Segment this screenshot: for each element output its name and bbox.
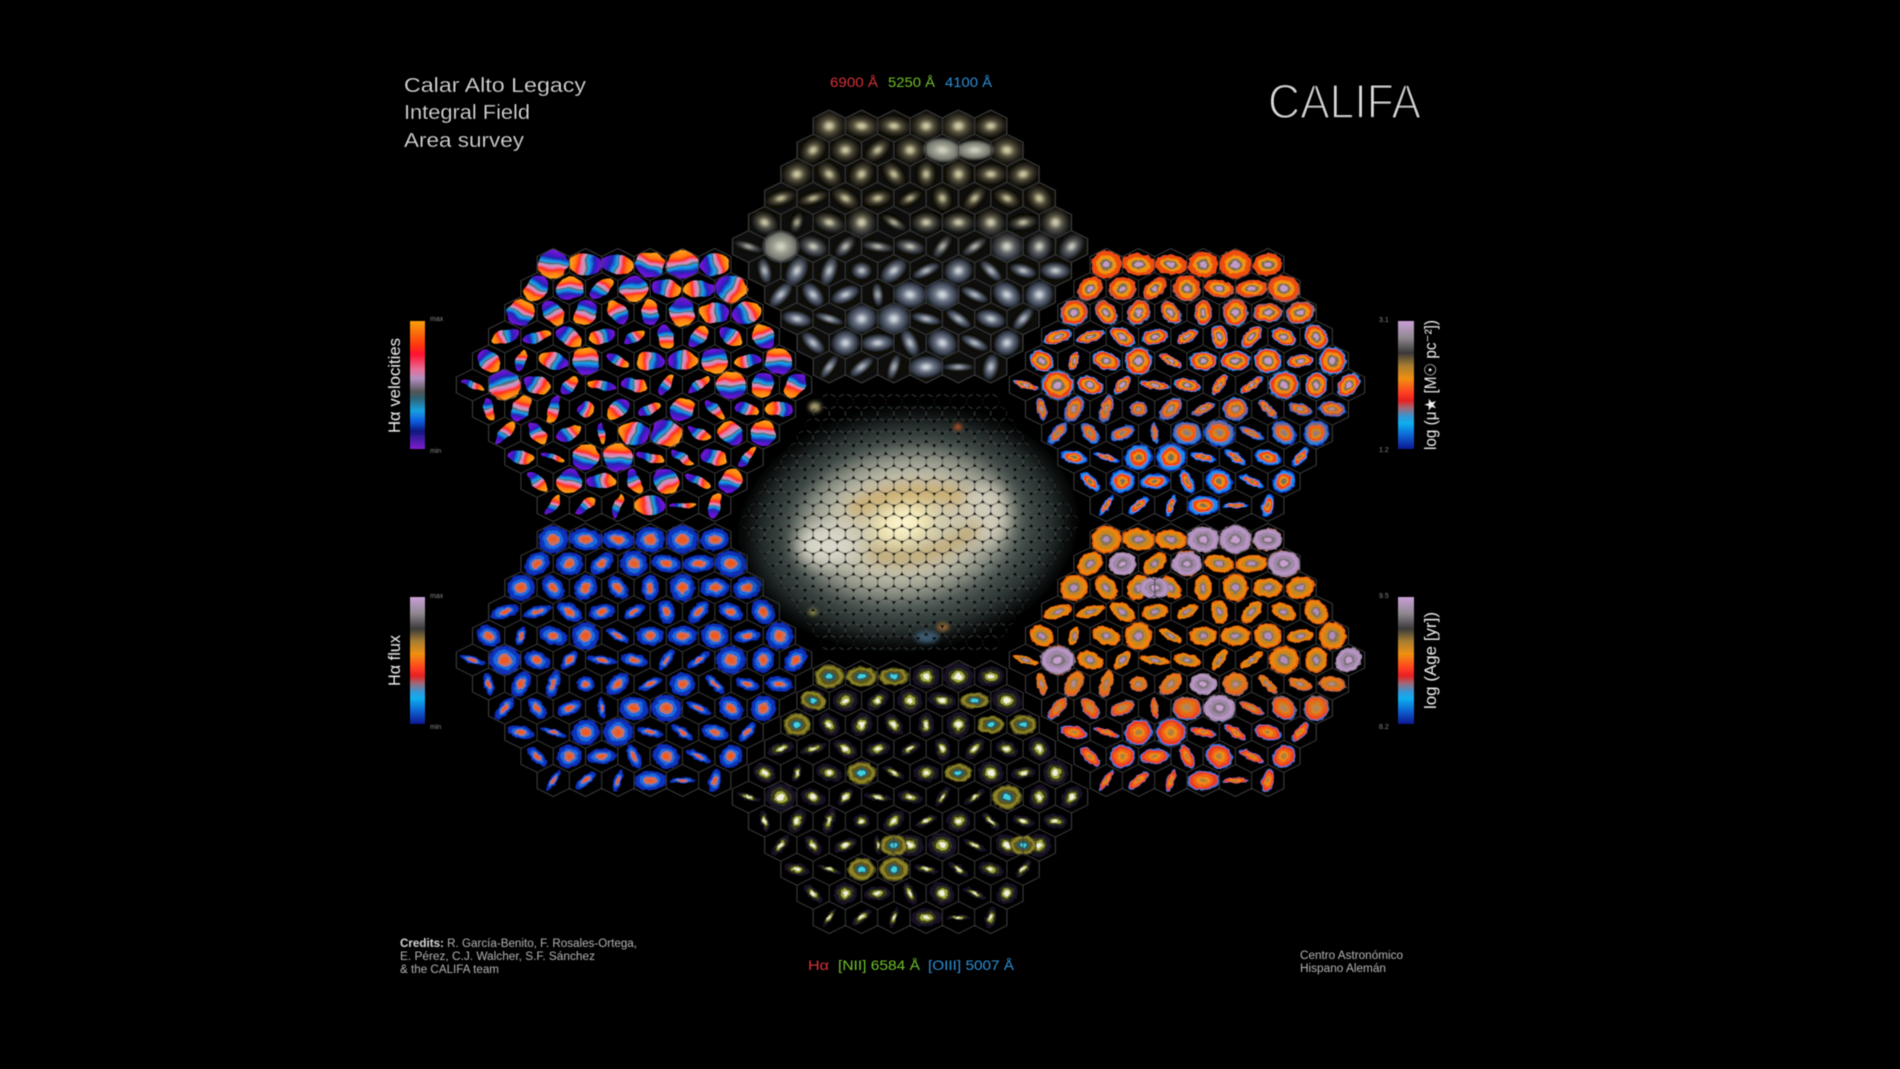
colour bar: H-alpha flux: max xyxy=(430,593,444,600)
title: survey name: Integral Field xyxy=(404,102,530,124)
panel: stellar mass density xyxy=(1002,245,1372,525)
colour bar: H-alpha flux: min xyxy=(430,724,441,731)
colour bar: H-alpha velocities: Hα velocities xyxy=(386,338,404,433)
institution: Hispano Alemán xyxy=(1300,963,1386,975)
credits xyxy=(400,938,637,976)
institution xyxy=(1300,950,1403,975)
colour bar: H-alpha velocities: max xyxy=(430,316,444,323)
colour bar: stellar mass density: 1.2 xyxy=(1379,447,1389,454)
credits: & the CALIFA team xyxy=(400,964,499,976)
colour bar: H-alpha flux xyxy=(386,593,444,731)
panel: H-alpha flux xyxy=(449,520,819,800)
panel: optical RGB galaxies xyxy=(725,106,1095,386)
title: survey name xyxy=(404,75,586,152)
colour bar: stellar age xyxy=(1379,593,1440,731)
legend: optical wavelengths xyxy=(830,75,992,90)
legend: optical wavelengths: 6900 Å xyxy=(830,75,878,90)
title: survey name: Calar Alto Legacy xyxy=(404,75,586,97)
text and legends xyxy=(386,75,1440,976)
legend: emission lines xyxy=(808,957,1015,973)
legend: emission lines: [NII] 6584 Å xyxy=(838,957,921,973)
colour bar: stellar age: 8.2 xyxy=(1379,724,1389,731)
heading: CALIFA: CALIFA xyxy=(1268,76,1421,129)
colour bar: stellar mass density xyxy=(1379,317,1440,454)
institution: Centro Astronómico xyxy=(1300,950,1403,962)
colour bar: H-alpha velocities xyxy=(386,316,444,455)
colour bar: stellar age: log (Age [yr]) xyxy=(1422,612,1440,709)
colour bar: H-alpha flux: Hα flux xyxy=(386,635,404,686)
colour bar: stellar mass density: 3.1 xyxy=(1379,317,1389,324)
panel: stellar age xyxy=(1002,520,1372,800)
legend: emission lines: [OIII] 5007 Å xyxy=(928,957,1015,973)
legend: optical wavelengths: 5250 Å xyxy=(888,75,935,90)
mosaic of hexagonal panels xyxy=(449,106,1372,937)
colour bar: H-alpha velocities: min xyxy=(430,448,441,455)
legend: optical wavelengths: 4100 Å xyxy=(945,75,992,90)
credits: E. Pérez, C.J. Walcher, S.F. Sánchez xyxy=(400,951,595,963)
title: survey name: Area survey xyxy=(404,130,524,152)
panel: emission lines xyxy=(725,657,1095,937)
panel: H-alpha velocities xyxy=(449,245,819,525)
galaxy bright spots xyxy=(809,402,962,643)
colour bar: stellar mass density: log (μ★ [M☉ pc⁻²]) xyxy=(1422,320,1440,450)
credits: Credits: R. García-Benito, F. Rosales-Ortega, xyxy=(400,938,637,950)
fibre grid overlay xyxy=(737,392,1083,652)
panel: central spiral galaxy with hexagonal fibre grid xyxy=(727,394,1082,651)
legend: emission lines: Hα xyxy=(808,957,829,973)
central galaxy image xyxy=(724,389,1092,667)
colour bar: stellar age: 9.5 xyxy=(1379,593,1389,600)
